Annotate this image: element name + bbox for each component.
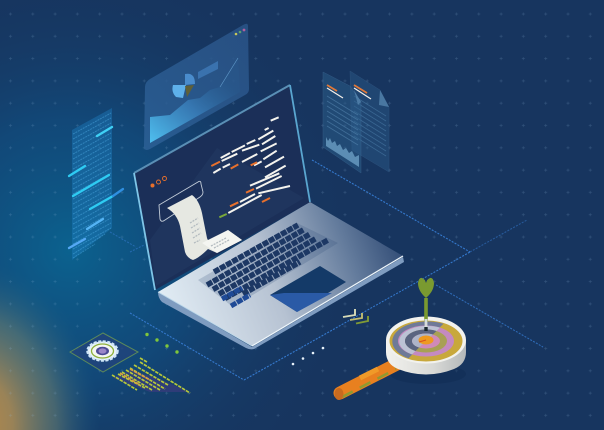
laptop deck xyxy=(158,202,403,346)
chart legend box xyxy=(198,61,218,79)
code snippet lines xyxy=(112,358,190,393)
screen shadow panel xyxy=(150,148,304,286)
panel: floating chart window xyxy=(144,24,249,150)
laptop xyxy=(134,85,404,349)
laptop base edge xyxy=(158,257,404,349)
magnifier handle xyxy=(334,358,399,400)
receipt print lines xyxy=(190,218,229,248)
pie chart xyxy=(172,74,195,98)
white progress dots xyxy=(292,347,324,365)
laptop screen xyxy=(134,85,310,290)
green progress dots xyxy=(145,333,179,354)
code lines on screen xyxy=(211,117,290,217)
keyboard xyxy=(198,223,338,307)
panel: binary data column xyxy=(69,108,123,260)
window control dots xyxy=(150,176,166,188)
icon: gear in diamond xyxy=(70,333,138,372)
highlighted data bars xyxy=(69,127,123,248)
target shaped magnifier xyxy=(334,278,466,400)
document front xyxy=(323,72,361,173)
panel: floating documents xyxy=(323,71,389,173)
target rings xyxy=(390,320,462,362)
document back xyxy=(350,71,389,172)
target rim xyxy=(386,340,466,374)
icon: chevron arrows xyxy=(343,309,368,324)
paper receipt xyxy=(167,195,242,260)
trackpad xyxy=(270,266,346,312)
floor dashed guide lines xyxy=(110,160,543,380)
deck front highlight xyxy=(252,256,403,346)
window controls xyxy=(235,29,245,35)
dart xyxy=(418,278,434,342)
target shadow xyxy=(390,364,466,384)
receipt printer slot xyxy=(159,181,203,221)
